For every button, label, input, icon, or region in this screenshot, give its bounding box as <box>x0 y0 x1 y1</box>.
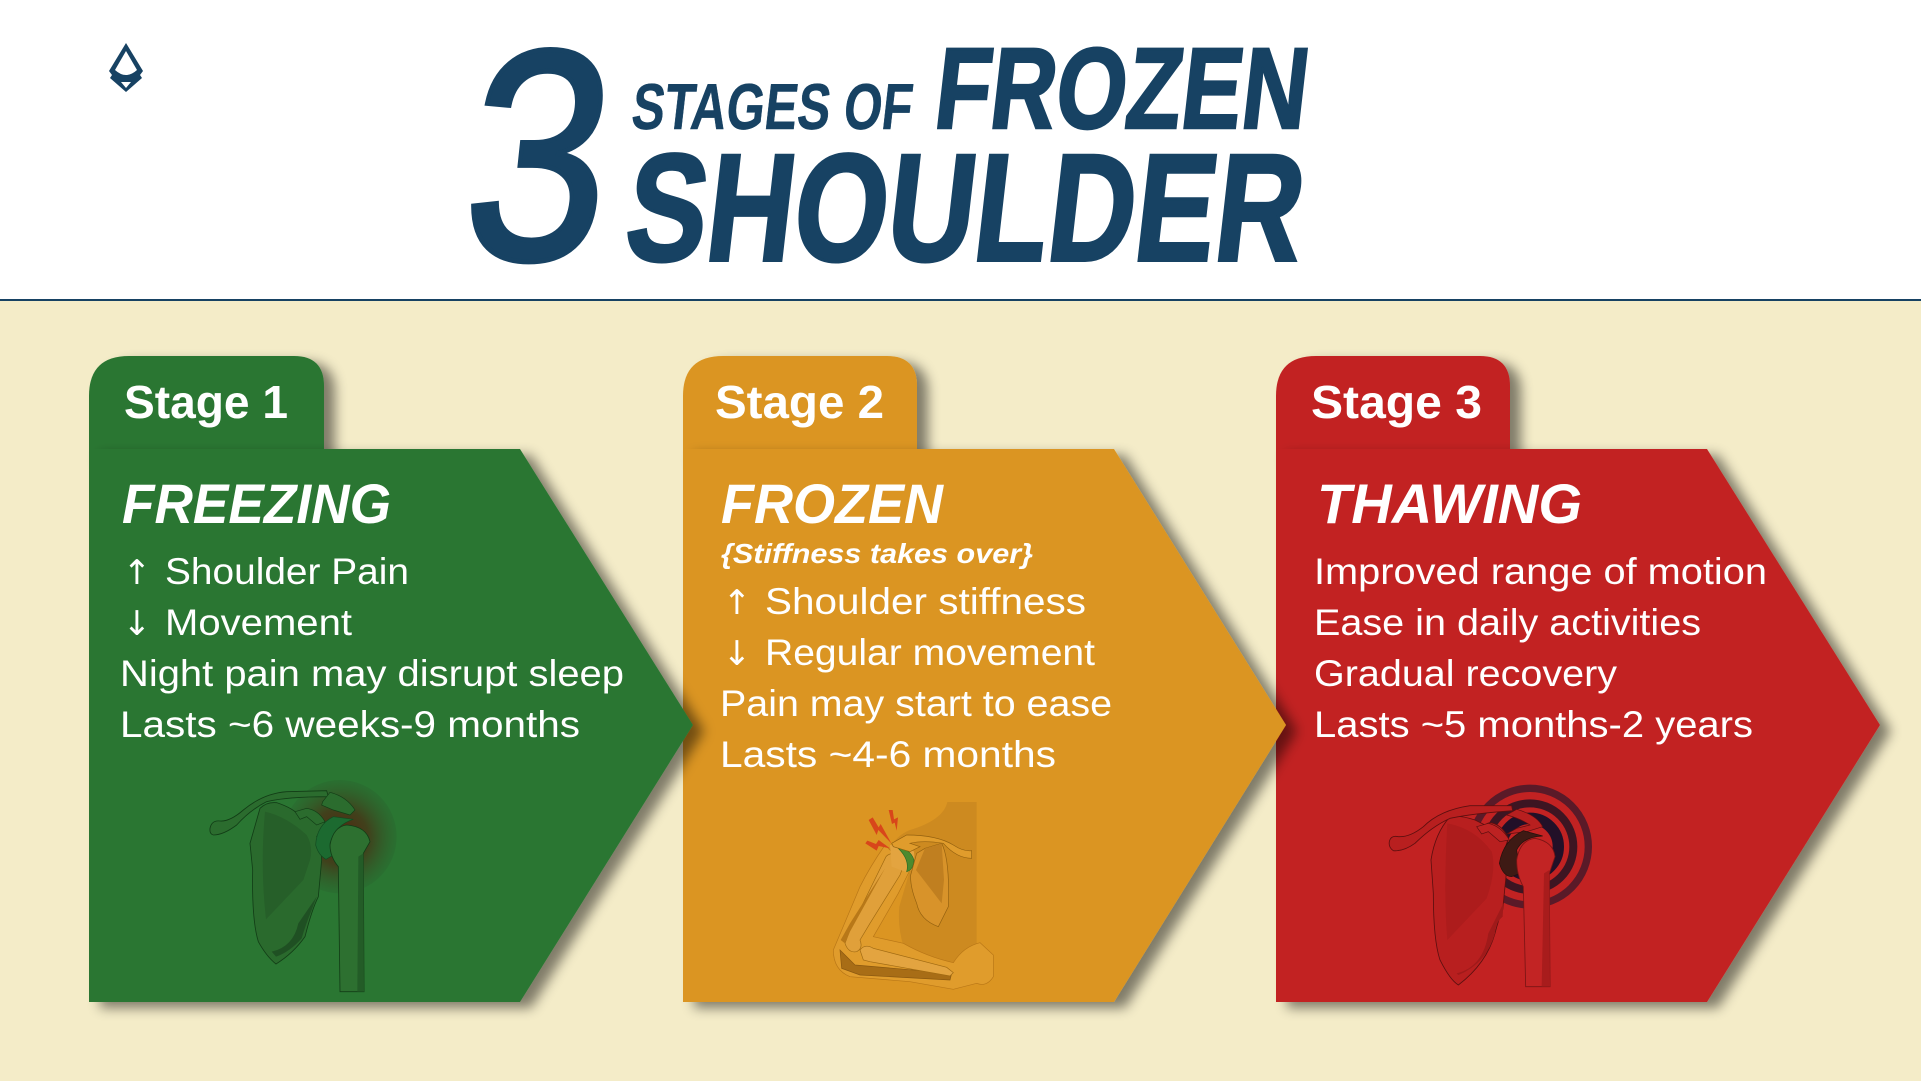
icon: lightning bolts <box>865 810 898 851</box>
stage 1 details: Lasts ~6 weeks-9 months <box>120 703 580 745</box>
cream background <box>0 300 1921 1081</box>
title <box>451 0 1316 323</box>
icon: red shoulder with pain rings <box>1389 788 1588 987</box>
stage 3 details: Lasts ~5 months-2 years <box>1314 703 1753 745</box>
upper arm bone <box>845 853 903 952</box>
stage 3 label: Stage 3 <box>1311 376 1482 428</box>
icon: logo <box>109 43 143 92</box>
forearm bones <box>840 950 952 980</box>
stage 3 name: THAWING <box>1317 472 1582 535</box>
title: SHOULDER <box>618 122 1314 293</box>
stage 3 details <box>1314 550 1767 745</box>
stage 3 details: Improved range of motion <box>1314 550 1767 592</box>
stage 3 details: Gradual recovery <box>1314 652 1617 694</box>
stage 2 details: Regular movement <box>765 631 1096 673</box>
title: FROZEN <box>929 25 1316 153</box>
stage 1 details: Shoulder Pain <box>165 550 409 592</box>
stage 3 arrow body <box>1276 449 1880 1002</box>
stage 2 details: Lasts ~4-6 months <box>720 733 1056 775</box>
stage 3 tab <box>1276 356 1510 460</box>
panel: stage 2 frozen <box>683 356 1286 1002</box>
icon: orange arm with shoulder pain <box>833 802 993 989</box>
stage 2 tab <box>683 356 917 460</box>
stage 2 details: ↑ <box>723 583 751 623</box>
stage 1 details: ↑ <box>123 553 151 593</box>
header divider <box>0 299 1921 301</box>
stage 1 details: Movement <box>165 601 353 643</box>
stage 1 details <box>120 550 624 745</box>
stage 2 details <box>720 580 1112 775</box>
stage 2 arrow body <box>683 449 1286 1002</box>
stage 2 details: Pain may start to ease <box>720 682 1112 724</box>
stage 2 label: Stage 2 <box>715 376 884 428</box>
stage 2 name: FROZEN <box>721 472 944 535</box>
stage 3 details: Ease in daily activities <box>1314 601 1701 643</box>
stage 1 arrow body <box>89 449 693 1002</box>
stage 2 details: Shoulder stiffness <box>765 580 1086 622</box>
stage 1 label: Stage 1 <box>124 376 288 428</box>
stage 1 details: ↓ <box>123 604 151 644</box>
stage 2 subtitle: {Stiffness takes over} <box>721 538 1033 569</box>
panel: stage 3 thawing <box>1276 356 1880 1002</box>
title: STAGES OF <box>628 70 917 143</box>
icon: green shoulder with glow <box>210 780 397 992</box>
stage 2 details: ↓ <box>723 634 751 674</box>
stage 1 tab <box>89 356 324 460</box>
stage 1 name: FREEZING <box>122 472 391 535</box>
panel: stage 1 freezing <box>89 356 693 1002</box>
stage 1 details: Night pain may disrupt sleep <box>120 652 624 694</box>
